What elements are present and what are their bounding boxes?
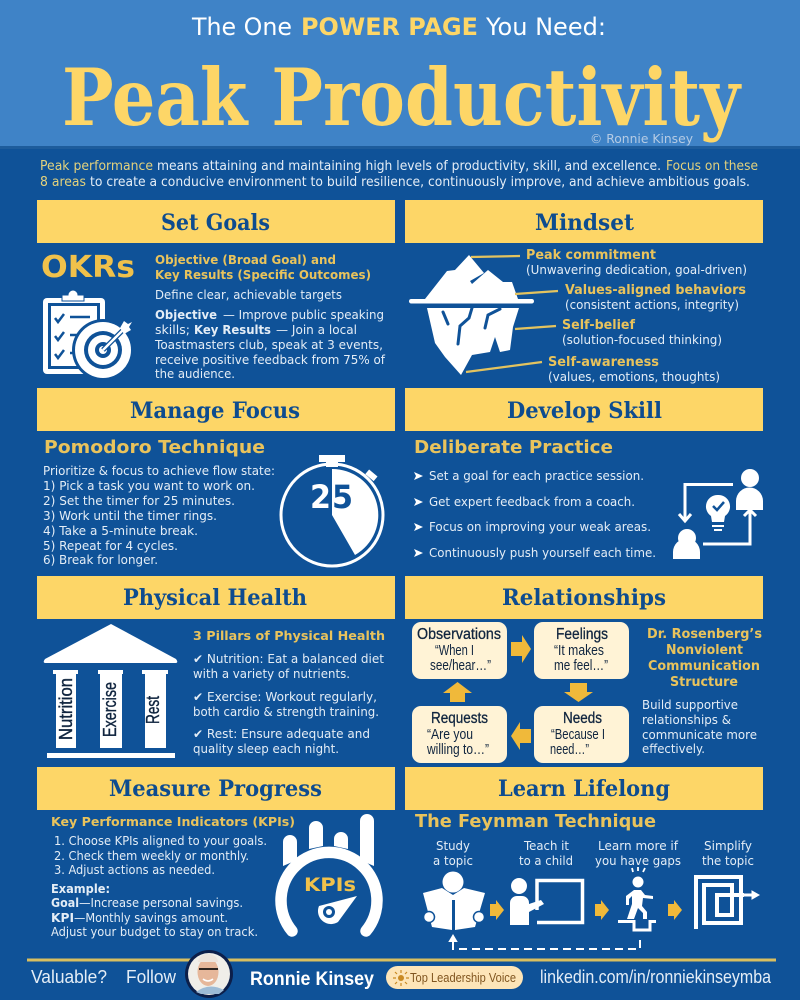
heading: develop skill [405,388,763,431]
kpi heading: Key Performance Indicators (KPIs) [51,814,295,829]
panel: manage focus [37,388,395,567]
badge: top leadership voice [386,966,523,989]
arrow: step one [490,900,504,920]
pomodoro steps [43,464,275,567]
pomodoro steps: 6) Break for longer. [43,553,158,567]
heading: physical health: Physical Health [123,585,307,611]
intro text: to create a conducive environment to build resilience, continuously improve, and achieve ambitious goals. [90,175,750,190]
okrs description: skills; [155,323,190,337]
nonviolent communication title: Structure [670,675,738,690]
header band [0,0,800,149]
pillars description [193,629,385,756]
subtitle: POWER PAGE [301,13,478,41]
feynman step labels: a topic [433,854,473,868]
icon: three pillars [44,624,177,758]
icon: person climbing step [618,867,656,930]
kpi steps [54,834,267,877]
pomodoro heading: Pomodoro Technique [44,437,265,458]
kpi example [51,882,258,939]
card: feelings [534,622,629,679]
mindset labels: (Unwavering dedication, goal-driven) [526,263,747,277]
okrs description [154,253,386,381]
mindset labels [526,248,747,384]
okrs description: receive positive feedback from 75% of [155,353,386,367]
card: feelings: Feelings [556,626,608,643]
card: needs: Needs [563,710,602,727]
footer name: Ronnie Kinsey [250,969,374,990]
kpi steps: 3. Adjust actions as needed. [54,863,215,877]
mindset labels: Self-belief [562,318,635,333]
icon: kpi gauge [281,814,377,931]
card: observations [412,622,507,679]
heading: relationships: Relationships [502,585,666,611]
nonviolent communication title: Communication [648,659,760,674]
linkedin url: linkedin.com/in/ronniekinseymba [540,967,772,987]
icon: feedback loop [673,469,763,559]
pillars description: both cardio & strength training. [193,705,379,719]
okrs description: — Join a local [276,323,357,337]
heading: manage focus [37,388,395,431]
subtitle: The One [191,13,292,41]
heading: measure progress: Measure Progress [109,776,322,802]
pomodoro steps: 4) Take a 5-minute break. [43,524,198,538]
feynman step labels: Learn more if [598,839,679,853]
kpi example: —Increase personal savings. [79,896,243,910]
feynman step labels: the topic [702,854,754,868]
panel: physical health [37,576,395,758]
portrait [185,950,233,998]
panel: develop skill [405,388,763,560]
feynman step labels [433,839,754,868]
arrow: dashed return loop [450,936,640,949]
okrs description: Objective [155,308,217,322]
icon: stopwatch: 2 [310,478,331,516]
deliberate practice list: Continuously push yourself each time. [429,546,656,560]
heading: learn lifelong [405,767,763,810]
footer call to action [31,967,177,987]
mindset labels: (solution-focused thinking) [562,333,722,347]
pomodoro steps: Prioritize & focus to achieve flow state: [43,464,275,478]
feynman step labels: you have gaps [595,854,681,868]
nonviolent communication description: relationships & [642,713,731,727]
kpi example: KPI [51,911,74,925]
kpi example: Goal [51,896,79,910]
mindset labels: Self-awareness [548,355,659,370]
kpi steps: 1. Choose KPIs aligned to your goals. [54,834,267,848]
nonviolent communication description: communicate more [642,728,757,742]
intro text: Focus on these [666,159,758,174]
intro text [40,159,758,190]
feynman step labels: Simplify [704,839,752,853]
feynman step labels: to a child [519,854,573,868]
feynman step labels: Teach it [523,839,569,853]
panel: set goals [37,200,395,381]
pomodoro steps: 3) Work until the timer rings. [43,509,217,523]
card: observations: see/hear…” [430,658,491,674]
heading: physical health [37,576,395,619]
subtitle: You Need: [485,13,606,41]
nonviolent communication title: Dr. Rosenberg’s [647,627,762,642]
leader lines [466,256,558,372]
heading: learn lifelong: Learn Lifelong [498,776,670,802]
heading: manage focus: Manage Focus [130,398,300,424]
intro text: 8 areas [40,175,86,190]
heading: relationships [405,576,763,619]
deliberate practice list [414,469,656,560]
card: requests [412,706,507,763]
icon: simplify spiral [696,877,759,929]
pomodoro steps: 2) Set the timer for 25 minutes. [43,494,235,508]
card: requests: willing to…” [426,742,489,758]
badge: top leadership voice: Top Leadership Voice [410,970,516,985]
footer [27,950,776,998]
deliberate practice list: Focus on improving your weak areas. [429,520,651,534]
panel: mindset [405,200,763,384]
pomodoro steps: 1) Pick a task you want to work on. [43,479,255,493]
footer call to action: Valuable? [31,967,107,987]
kpi example: Example: [51,882,110,896]
okrs description: the audience. [155,367,235,381]
okrs description: Define clear, achievable targets [155,288,342,302]
icon: three pillars: Exercise [100,682,120,737]
pillars description: 3 Pillars of Physical Health [193,629,385,643]
nonviolent communication description: Build supportive [642,698,738,712]
okrs description: Objective (Broad Goal) and [155,253,336,267]
pomodoro steps: 5) Repeat for 4 cycles. [43,539,178,553]
mindset labels: Values-aligned behaviors [565,283,746,298]
feynman step labels: Study [436,839,470,853]
heading: develop skill: Develop Skill [507,398,662,424]
heading: set goals [37,200,395,243]
card: needs: need…” [550,742,589,758]
pillars description: ✔ Nutrition: Eat a balanced diet [193,652,384,666]
arrow: step three [668,900,682,920]
nonviolent communication title [647,627,762,690]
intro text: Peak performance [40,159,153,174]
nonviolent communication title: Nonviolent [666,643,743,658]
card: requests: “Are you [427,727,473,743]
heading: set goals: Set Goals [161,210,270,236]
mindset labels: (consistent actions, integrity) [565,298,739,312]
kpi example: —Monthly savings amount. [74,911,228,925]
pillars description: with a variety of nutrients. [193,667,350,681]
okrs description: Toastmasters club, speak at 3 events, [154,338,383,352]
heading: measure progress [37,767,395,810]
card: requests: Requests [431,710,488,727]
nonviolent communication description [642,698,757,756]
panel: learn lifelong [405,767,763,949]
card: observations: “When I [435,643,474,659]
pillars description: quality sleep each night. [193,742,339,756]
icon: stopwatch [281,455,383,566]
panel: relationships [405,576,763,763]
panel: measure progress [37,767,395,939]
icon: teacher at board [510,878,582,925]
card: feelings: “It makes [554,643,604,659]
intro text: means attaining and maintaining high levels of productivity, skill, and excellence. [157,159,661,174]
deliberate practice list: Get expert feedback from a coach. [429,495,635,509]
copyright: © Ronnie Kinsey [590,132,693,146]
icon: three pillars: Rest [143,696,163,724]
okrs description: Key Results (Specific Outcomes) [155,268,371,282]
deliberate practice list: Set a goal for each practice session. [429,469,644,483]
deliberate practice heading: Deliberate Practice [414,437,613,458]
pillars description: ✔ Rest: Ensure adequate and [193,727,370,741]
icon: reader [423,872,485,930]
okrs description: Key Results [194,323,271,337]
arrow: step two [595,900,609,920]
card: observations: Observations [417,626,501,643]
arrows: cycle [443,635,593,750]
feynman heading: The Feynman Technique [415,811,656,832]
okrs description: — Improve public speaking [223,308,384,322]
footer call to action: Follow [126,967,177,987]
icon: clipboard and target [43,290,134,381]
heading: mindset [405,200,763,243]
mindset labels: (values, emotions, thoughts) [548,370,720,384]
nonviolent communication description: effectively. [642,742,705,756]
card: feelings: me feel…” [554,658,608,674]
icon: iceberg [409,255,534,375]
card: needs: “Because I [551,727,605,743]
icon: stopwatch: 5 [332,478,353,516]
okrs label: OKRs [41,250,135,285]
subtitle [191,13,606,41]
heading: mindset: Mindset [535,210,635,236]
card: needs [534,706,629,763]
icon: kpi gauge: KPIs [304,874,356,896]
mindset labels: Peak commitment [526,248,656,263]
kpi example: Adjust your budget to stay on track. [51,925,258,939]
kpi steps: 2. Check them weekly or monthly. [54,849,249,863]
icon: three pillars: Nutrition [56,678,76,740]
pillars description: ✔ Exercise: Workout regularly, [193,690,377,704]
